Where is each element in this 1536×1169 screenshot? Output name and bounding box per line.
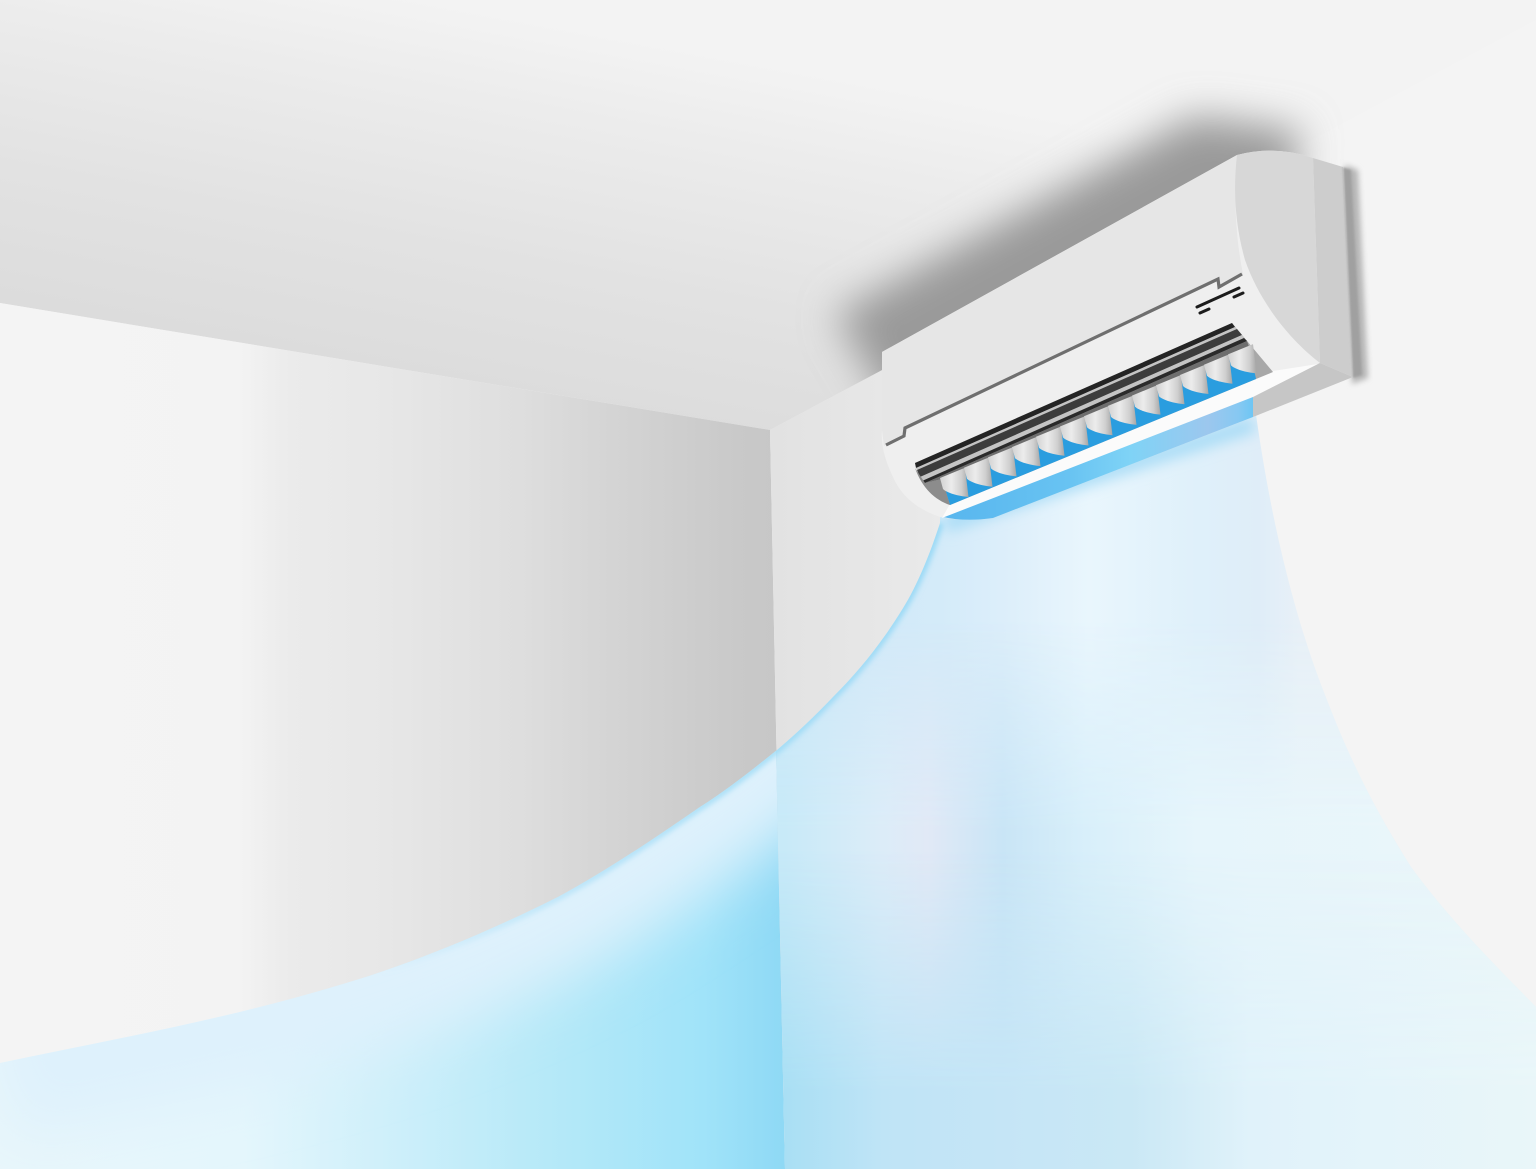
unit body (882, 151, 1353, 520)
curved end panel (1235, 151, 1320, 363)
vent slots (915, 323, 1250, 483)
vent left corner (915, 468, 950, 505)
panel seam (886, 274, 1242, 445)
air conditioner unit (882, 151, 1362, 520)
cold air flow (0, 380, 1536, 1169)
air flow: glow under the unit (945, 424, 1254, 524)
air flow: bright edge (434, 520, 945, 953)
dark side edge (1343, 167, 1362, 378)
shadow of the unit on the wall (1345, 165, 1368, 384)
shadow of the unit on the ceiling (836, 116, 1300, 420)
air flow: left wall section (0, 750, 785, 1169)
flat end panel (1313, 158, 1353, 377)
vent opening (915, 323, 1273, 505)
air flow: right wall section (775, 380, 1536, 1169)
left wall (0, 303, 785, 1169)
upper front panel (882, 155, 1243, 446)
underside (1253, 363, 1353, 417)
ceiling (0, 0, 1536, 430)
right wall patch restoring the wall below the ceiling line (770, 369, 884, 520)
white lip (942, 364, 1318, 518)
vent blue interior (942, 350, 1256, 505)
display indicator (1197, 288, 1243, 313)
louvers (940, 344, 1256, 497)
right wall (770, 20, 1536, 1169)
blue glow band (943, 393, 1253, 520)
